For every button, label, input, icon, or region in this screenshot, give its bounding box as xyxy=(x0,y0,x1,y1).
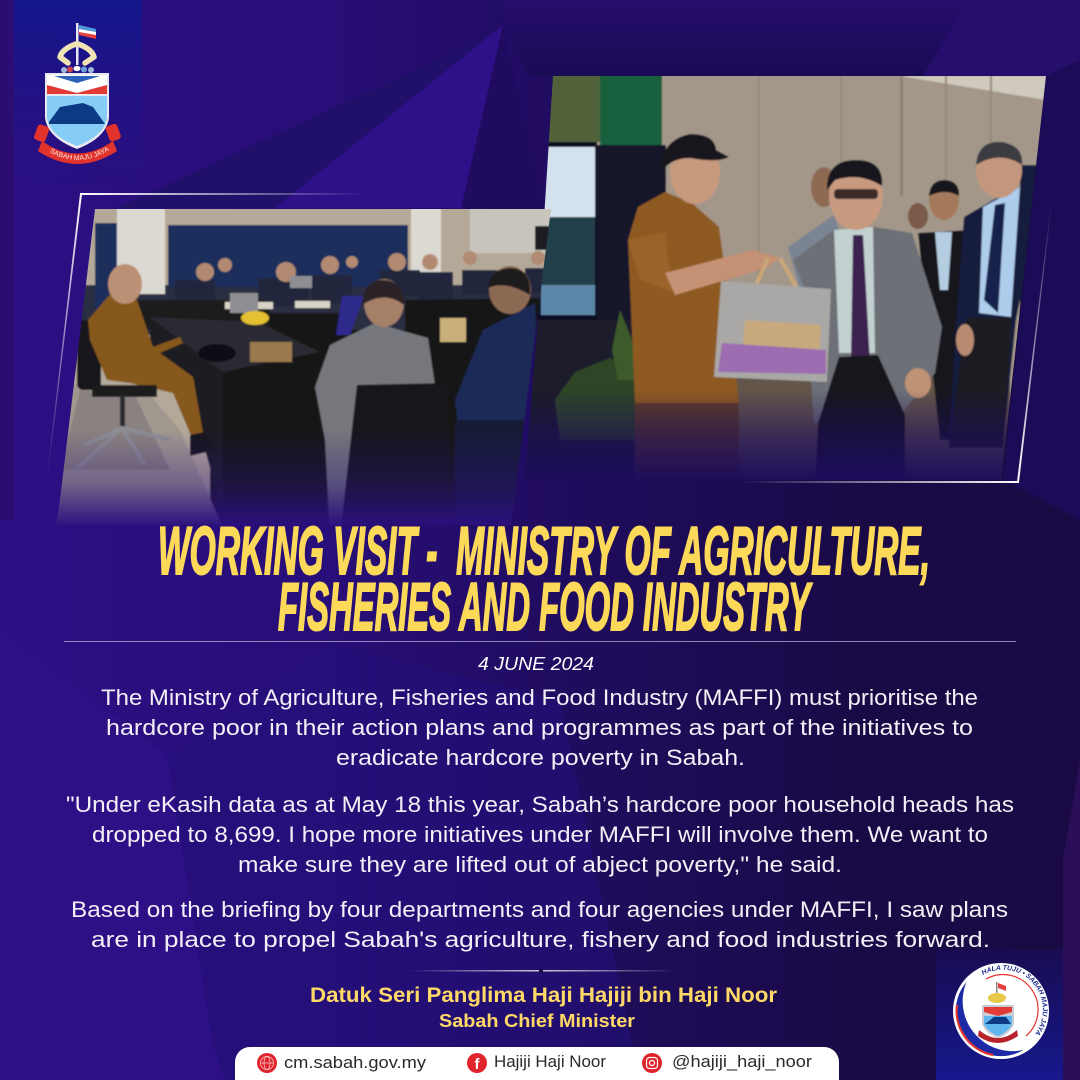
paragraph 3 xyxy=(71,897,1008,952)
figure: laughing man right xyxy=(949,141,1024,448)
hands holding pole xyxy=(60,44,94,63)
logo: Sabah coat of arms xyxy=(34,23,121,164)
logo: Hala Tuju badge xyxy=(953,963,1049,1059)
figure: man behind xyxy=(788,166,840,288)
figure: man in brown shirt with cap xyxy=(628,134,780,488)
back row of attendees xyxy=(175,251,551,306)
signatory name: Datuk Seri Panglima Haji Hajiji bin Haji Noor xyxy=(310,984,777,1007)
motto ribbon xyxy=(34,124,121,164)
facebook name: Hajiji Haji Noor xyxy=(494,1052,606,1071)
floor xyxy=(60,384,220,522)
paragraph 1: The Ministry of Agriculture, Fisheries and Food Industry (MAFFI) must prioritise the xyxy=(101,685,978,710)
gift bag xyxy=(714,258,831,382)
figure: man in grey suit xyxy=(793,160,942,490)
paragraph 2: "Under eKasih data as at May 18 this year, Sabah’s hardcore poor household heads has xyxy=(66,792,1014,817)
title divider xyxy=(64,641,1016,642)
paragraph 3: are in place to propel Sabah's agriculture, fishery and food industries forward. xyxy=(91,927,990,952)
mini crest xyxy=(978,982,1018,1043)
figure: navy suit xyxy=(455,266,540,535)
figure: chief minister seated xyxy=(75,264,215,470)
paragraph 2 xyxy=(66,792,1014,877)
flag xyxy=(76,23,96,65)
paragraph 2: make sure they are lifted out of abject poverty," he said. xyxy=(238,852,842,877)
website address: cm.sabah.gov.my xyxy=(284,1053,427,1072)
wide tables xyxy=(136,274,540,476)
beads xyxy=(61,66,94,73)
title xyxy=(158,513,930,645)
paragraph 1: eradicate hardcore poverty in Sabah. xyxy=(336,745,745,770)
body text xyxy=(66,685,1014,952)
paragraph 1: hardcore poor in their action plans and programmes as part of the initiatives to xyxy=(106,715,973,740)
badge motto: HALA TUJU • SABAH MAJU JAYA xyxy=(982,965,1048,1036)
motto ribbon: SABAH MAJU JAYA xyxy=(50,147,110,160)
figure: grey suit seen from behind xyxy=(314,278,436,522)
signatory name: Sabah Chief Minister xyxy=(439,1011,635,1031)
paragraph 1 xyxy=(101,685,978,770)
photo: minister handing gift bag xyxy=(520,70,1055,490)
icon: instagram xyxy=(642,1053,662,1073)
instagram handle: @hajiji_haji_noor xyxy=(672,1052,812,1071)
paragraph 2: dropped to 8,699. I hope more initiatives under MAFFI will involve them. We want to xyxy=(92,822,988,847)
figure: man in dark suit xyxy=(908,179,964,440)
contact bar xyxy=(235,1047,839,1080)
icon: facebook: f xyxy=(474,1056,480,1073)
frame lines around photos xyxy=(47,193,1052,483)
paragraph 3: Based on the briefing by four departments and four agencies under MAFFI, I saw plans xyxy=(71,897,1008,922)
shield xyxy=(45,73,109,149)
signatory name xyxy=(310,984,777,1031)
icon: website globe xyxy=(257,1053,277,1073)
icon: facebook xyxy=(467,1053,487,1073)
photo: meeting around tables xyxy=(57,209,551,525)
signature ornament xyxy=(408,969,675,973)
date: 4 JUNE 2024 xyxy=(478,654,594,674)
